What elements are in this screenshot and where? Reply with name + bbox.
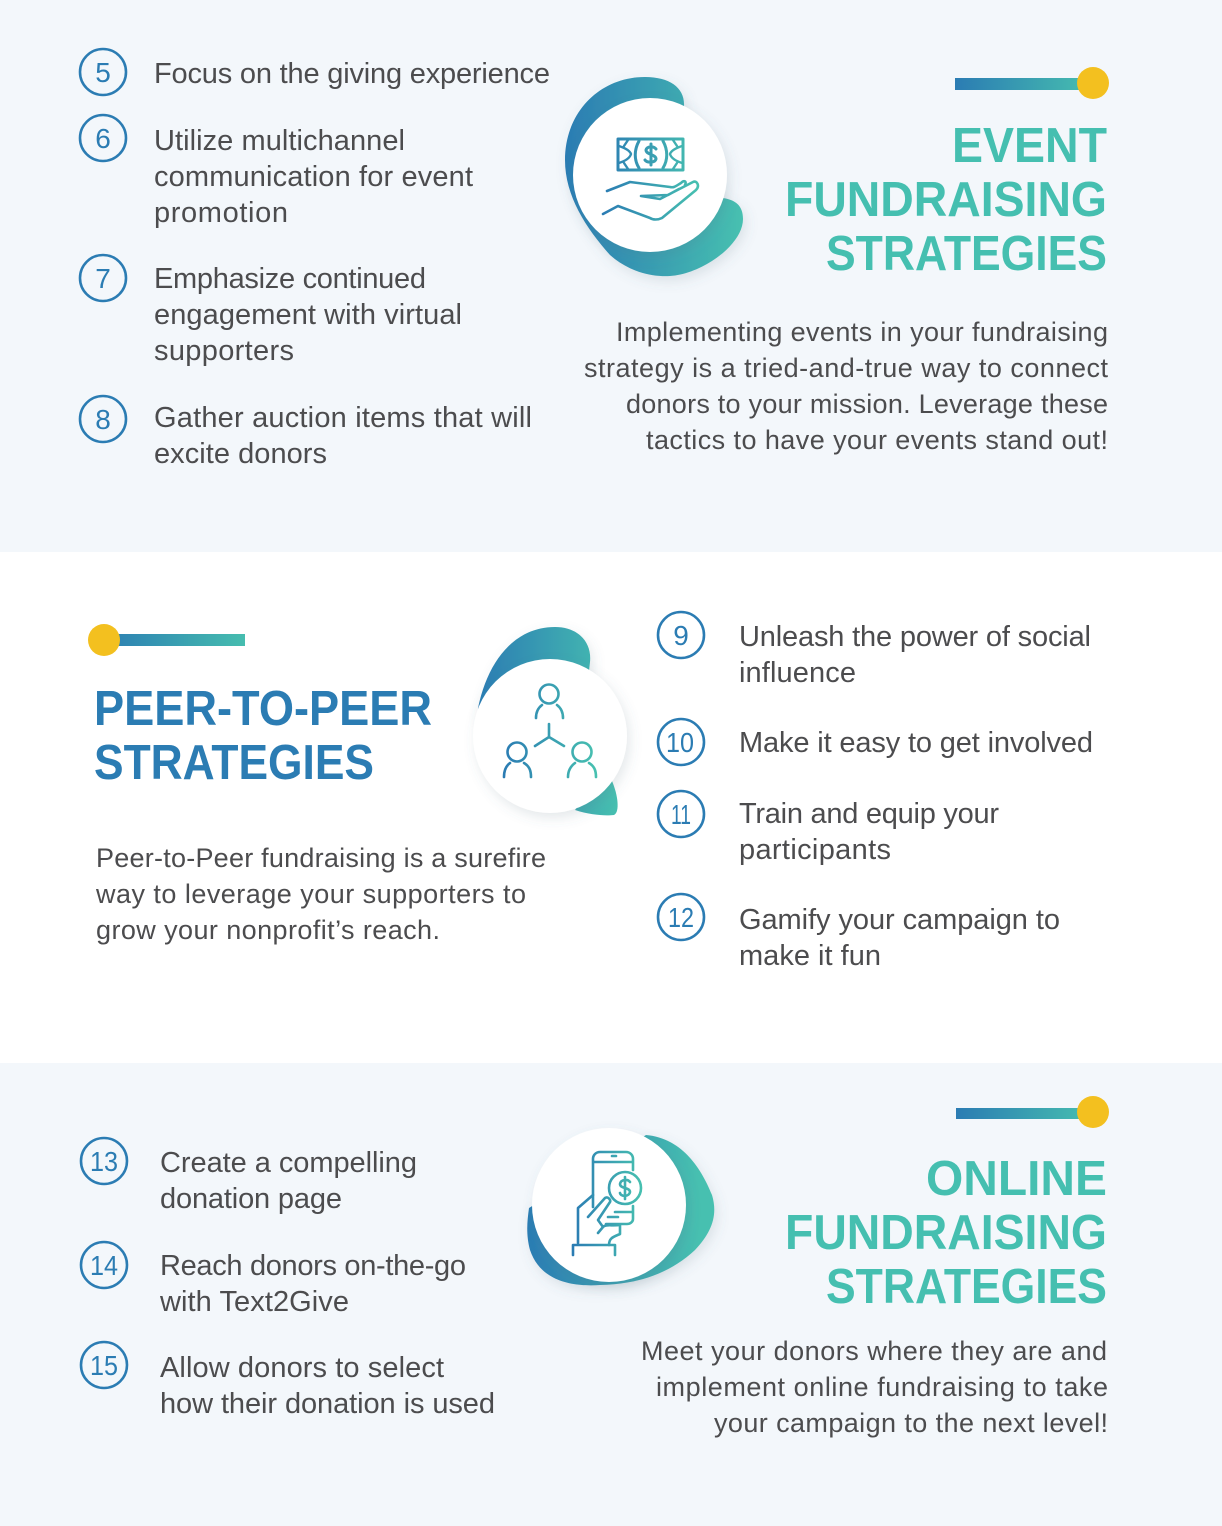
- icon: connected people: [473, 627, 627, 815]
- item 6: Utilize multichannel: [154, 125, 405, 157]
- peer-to-peer description text: [95, 843, 546, 945]
- item 9: [658, 612, 1091, 689]
- item 13: [81, 1138, 417, 1215]
- event description text: [584, 317, 1108, 455]
- item 15: how their donation is used: [160, 1388, 495, 1420]
- item 12: Gamify your campaign to: [739, 904, 1060, 936]
- heading: event fundraising strategies: FUNDRAISING: [785, 173, 1107, 227]
- item 14: Reach donors on-the-go: [160, 1250, 466, 1282]
- accent bar with dot: [955, 67, 1109, 99]
- peer-to-peer description text: grow your nonprofit’s reach.: [96, 915, 440, 945]
- online description text: [641, 1336, 1108, 1438]
- accent bar with dot: [956, 1096, 1109, 1128]
- item 6: promotion: [154, 197, 288, 229]
- item 6: communication for event: [154, 161, 473, 193]
- event description text: Implementing events in your fundraising: [616, 317, 1108, 347]
- icon: hand holding money: [565, 77, 743, 276]
- item 6: 6: [95, 123, 111, 154]
- event description text: tactics to have your events stand out!: [646, 425, 1108, 455]
- item 13: Create a compelling: [160, 1147, 417, 1179]
- item 5: 5: [95, 57, 111, 88]
- heading: online fundraising strategies: STRATEGIES: [826, 1260, 1107, 1314]
- heading: online fundraising strategies: ONLINE: [926, 1152, 1107, 1206]
- numbered list: event tactics: [80, 49, 550, 470]
- item 7: Emphasize continued: [154, 263, 426, 295]
- item 12: make it fun: [739, 940, 881, 972]
- heading: online fundraising strategies: FUNDRAISING: [785, 1206, 1107, 1260]
- item 12: 12: [668, 902, 694, 933]
- item 10: 10: [666, 727, 694, 758]
- item 9: influence: [739, 657, 856, 689]
- heading: event fundraising strategies: [785, 119, 1107, 281]
- item 6: [80, 115, 473, 229]
- item 7: 7: [95, 263, 111, 294]
- numbered list: online tactics: [81, 1138, 495, 1420]
- item 8: 8: [95, 404, 111, 435]
- item 5: Focus on the giving experience: [154, 58, 550, 90]
- icon: phone with hand and coin: [527, 1128, 714, 1285]
- item 7: supporters: [154, 335, 294, 367]
- item 11: participants: [739, 834, 891, 866]
- heading: peer-to-peer strategies: [94, 682, 432, 790]
- item 10: Make it easy to get involved: [739, 727, 1093, 759]
- heading: peer-to-peer strategies: PEER-TO-PEER: [94, 682, 432, 736]
- panel: peer-to-peer strategies: [0, 552, 1222, 1063]
- item 13: donation page: [160, 1183, 342, 1215]
- item 7: [80, 255, 462, 367]
- item 8: Gather auction items that will: [154, 402, 532, 434]
- event description text: strategy is a tried-and-true way to connect: [584, 353, 1108, 383]
- item 14: 14: [90, 1250, 118, 1281]
- item 15: [81, 1342, 495, 1420]
- item 8: excite donors: [154, 438, 327, 470]
- item 5: [80, 49, 550, 95]
- accent bar with dot: [88, 624, 245, 656]
- peer-to-peer description text: Peer-to-Peer fundraising is a surefire: [96, 843, 546, 873]
- item 14: with Text2Give: [159, 1286, 349, 1318]
- item 9: 9: [673, 620, 689, 651]
- white band background: [0, 552, 1222, 1063]
- event description text: donors to your mission. Leverage these: [626, 389, 1108, 419]
- item 15: Allow donors to select: [160, 1352, 444, 1384]
- numbered list: peer-to-peer tactics: [658, 612, 1093, 972]
- item 10: [658, 719, 1093, 765]
- item 7: engagement with virtual: [154, 299, 462, 331]
- item 9: Unleash the power of social: [739, 621, 1091, 653]
- panel: online fundraising strategies: [81, 1096, 1109, 1438]
- peer-to-peer description text: way to leverage your supporters to: [95, 879, 526, 909]
- heading: event fundraising strategies: EVENT: [952, 119, 1107, 173]
- online description text: your campaign to the next level!: [714, 1408, 1108, 1438]
- online description text: Meet your donors where they are and: [641, 1336, 1107, 1366]
- item 12: [658, 894, 1060, 972]
- item 8: [80, 396, 532, 470]
- item 15: 15: [90, 1350, 118, 1381]
- heading: peer-to-peer strategies: STRATEGIES: [94, 736, 374, 790]
- item 13: 13: [90, 1146, 118, 1177]
- heading: event fundraising strategies: STRATEGIES: [826, 227, 1107, 281]
- panel: event fundraising strategies: [80, 49, 1109, 470]
- online description text: implement online fundraising to take: [656, 1372, 1108, 1402]
- heading: online fundraising strategies: [785, 1152, 1107, 1314]
- item 11: [658, 791, 999, 866]
- item 11: Train and equip your: [739, 798, 999, 830]
- item 14: [81, 1242, 466, 1318]
- item 11: 11: [671, 799, 691, 830]
